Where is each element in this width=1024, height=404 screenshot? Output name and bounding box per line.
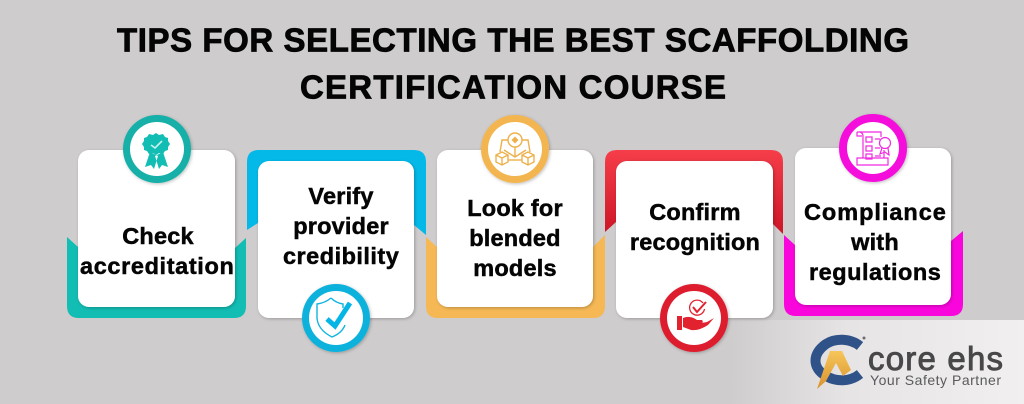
icon: blended model [481,115,549,183]
label: check accreditation: accreditation [80,253,234,279]
logo tagline: Your Safety Partner [870,372,1001,388]
title: TIPS FOR SELECTING THE BEST SCAFFOLDING [117,22,909,58]
logo backdrop panel [730,320,1024,404]
label: confirm recognition: recognition [630,229,760,255]
logo: core ehs [816,336,1003,389]
label: look for blended models [467,195,563,281]
label: compliance with regulations: with [850,229,899,255]
label: confirm recognition: Confirm [649,199,741,225]
label: verify provider credibility: credibility [283,243,399,269]
label: verify provider credibility [283,183,399,269]
icon: shield check [302,284,370,352]
icon: compliance checklist [843,118,903,178]
icon: hand with check [660,284,728,352]
label: compliance with regulations: regulations [809,259,941,285]
panel: look for blended models [426,115,605,318]
panel: confirm recognition [605,150,783,352]
logo mark [816,336,866,389]
label: check accreditation: Check [122,223,194,249]
panel: compliance with regulations [784,118,963,316]
label: verify provider credibility: Verify [308,183,374,209]
title [117,22,909,106]
label: confirm recognition [630,199,760,255]
icon: rosette badge [123,115,191,183]
label: look for blended models: Look for [467,195,563,221]
panel: verify provider credibility [247,150,426,352]
label: look for blended models: blended [469,225,561,251]
label: compliance with regulations: Compliance [804,199,946,225]
label: verify provider credibility: provider [293,213,389,239]
label: check accreditation [80,223,234,279]
logo wordmark: core ehs [868,340,1003,377]
label: compliance with regulations [804,199,946,285]
panel: check accreditation [67,115,246,318]
title: CERTIFICATION COURSE [300,68,726,106]
label: look for blended models: models [473,255,557,281]
